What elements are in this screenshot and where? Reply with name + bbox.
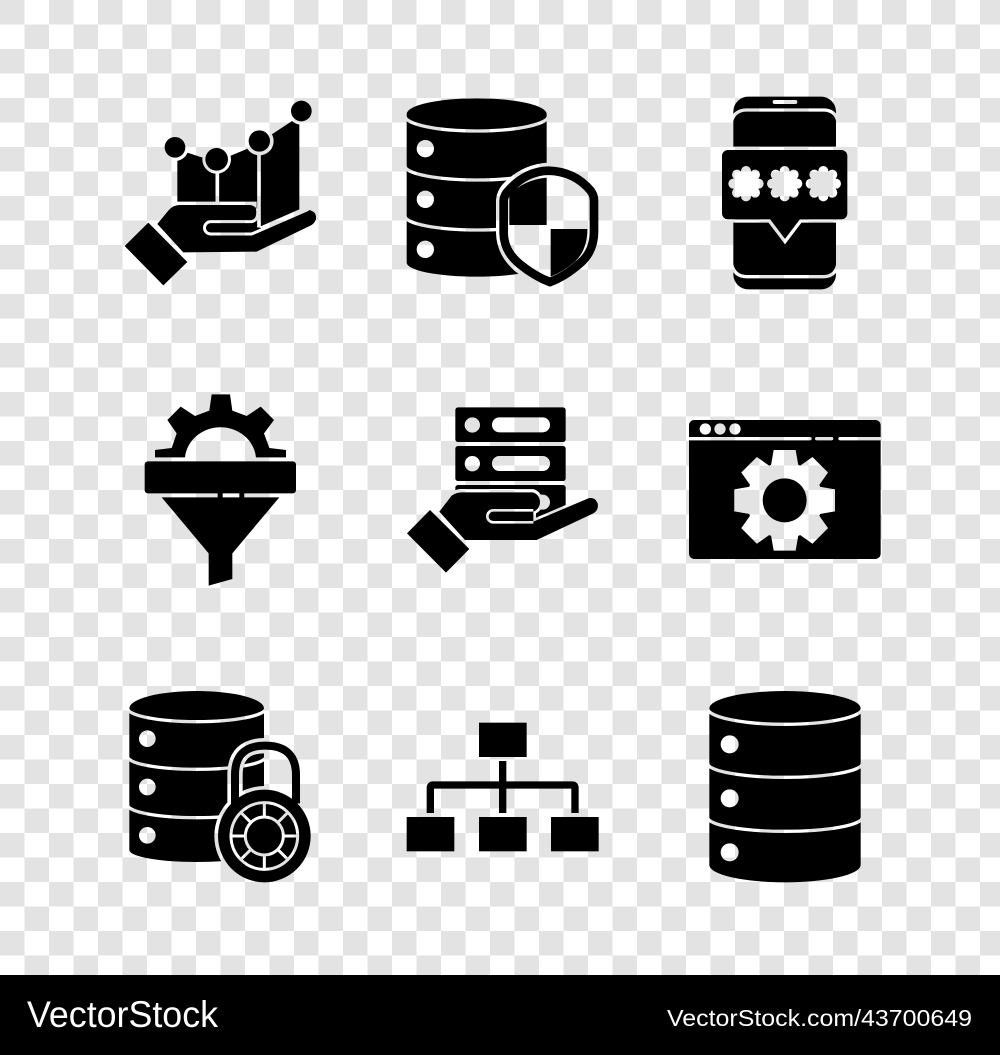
icon: database (709, 691, 861, 882)
icon: smartphone with password bubble (722, 97, 847, 289)
icon: hierarchy diagram (407, 723, 599, 851)
icon: hand holding line chart (125, 101, 316, 285)
icon: database with combination lock (129, 691, 311, 882)
footer image id: VectorStock.com/43700649 (667, 1005, 972, 1031)
footer bar (0, 975, 1000, 1055)
icon: browser window with gear (689, 420, 881, 559)
footer brand: VectorStock (27, 994, 218, 1035)
icon: funnel with gear (145, 394, 296, 586)
icon: database with shield (407, 98, 594, 282)
icon: hand holding servers (407, 407, 598, 573)
